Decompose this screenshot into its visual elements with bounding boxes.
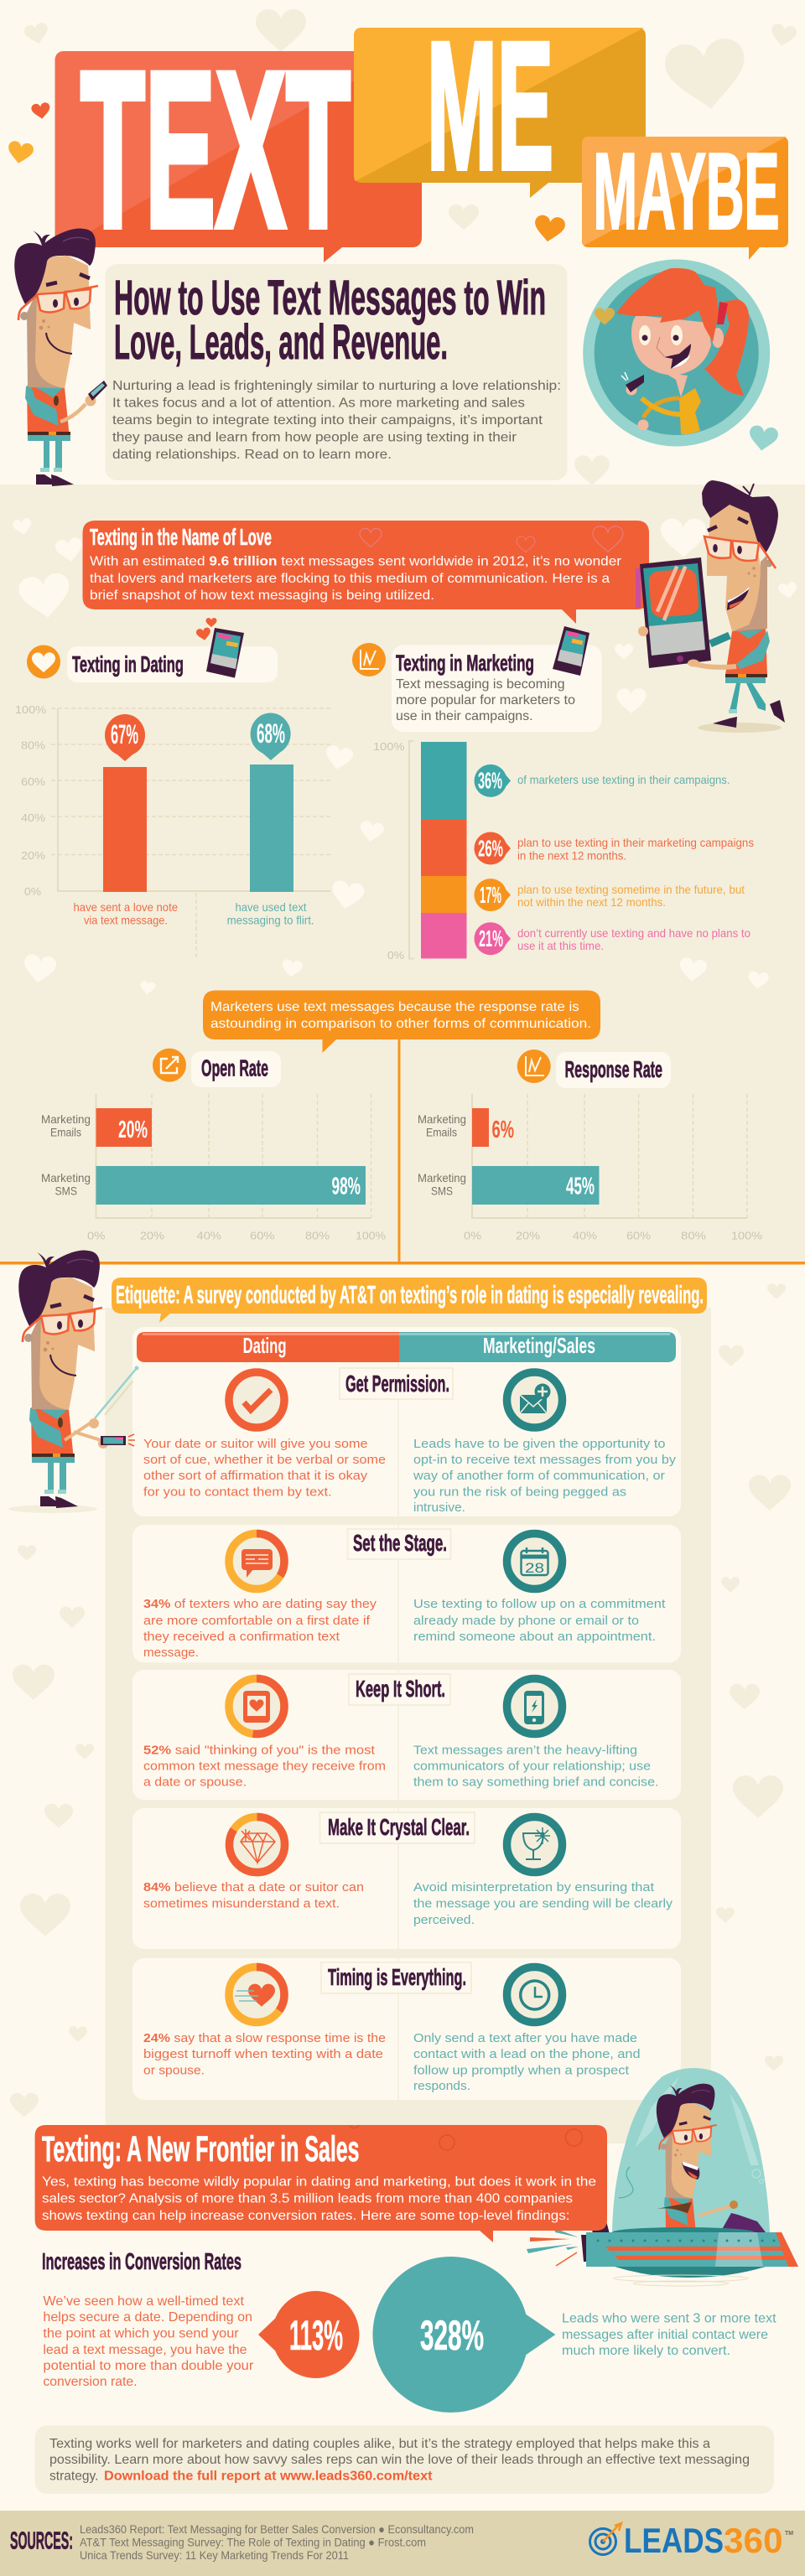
text: dating stage <box>143 1597 377 1660</box>
bar chart: response rate: 60% <box>626 1229 651 1242</box>
card: make it crystal clear <box>132 1808 681 1949</box>
panel: conclusion: Texting works well for marketers and dating couples alike, but it’s the strategy employed that helps make this a <box>49 2437 710 2451</box>
text: marketing permission: way of another form of communication, or <box>413 1469 665 1483</box>
bar: 68%: have used text <box>235 900 307 914</box>
title: speech bubble ME <box>354 4 646 207</box>
heading: set the stage <box>347 1529 451 1559</box>
sources list: Unica Trends Survey: 11 Key Marketing Trends For 2011 <box>80 2548 349 2562</box>
title: speech bubble ME: ME <box>427 4 553 207</box>
text: 113 percent explanation: We’ve seen how a well-timed text <box>43 2294 245 2309</box>
table header: dating: Dating <box>243 1333 287 1358</box>
text: dating stage: are more comfortable on a first date if <box>143 1614 371 1628</box>
segment callout: 21%: don’t currently use texting and have no plans to <box>517 926 750 940</box>
text: 328 percent explanation <box>562 2312 776 2358</box>
orange divider lines <box>0 1039 805 1264</box>
heading: timing is everything <box>321 1962 471 1993</box>
bar: marketing sms 98% <box>41 1166 366 1205</box>
bar: marketing emails 6%: Marketing <box>418 1112 466 1126</box>
stacked bar chart: texting in marketing <box>373 740 754 961</box>
segment callout: 36%: 36% <box>478 768 502 794</box>
text: dating timing <box>143 2031 386 2078</box>
heading: response rate: Response Rate <box>565 1056 662 1082</box>
heading: set the stage: Set the Stage. <box>353 1530 447 1556</box>
text: 328 percent explanation: Leads who were sent 3 or more text <box>562 2312 776 2326</box>
icon: heart in orange circle <box>27 645 60 679</box>
text: dating clear <box>143 1880 364 1911</box>
illustration: girl with phone in circle <box>583 260 770 446</box>
stacked bar chart: texting in marketing: 0% <box>387 949 404 961</box>
icon: phone with hearts <box>195 618 244 678</box>
bar: marketing emails 20%: Marketing <box>41 1112 91 1126</box>
segment callout: 26%: 26% <box>478 835 503 862</box>
segment callout: 26%: in the next 12 months. <box>517 849 626 863</box>
text: marketing clear: Avoid misinterpretation by ensuring that <box>413 1880 655 1894</box>
segment callout: 36%: of marketers use texting in their campaigns. <box>517 773 730 786</box>
text: 113 percent explanation: lead a text message, you have the <box>43 2343 247 2357</box>
bar: 68%: 68% <box>257 718 285 749</box>
icon: clock <box>506 1967 562 2022</box>
title: speech bubble TEXT: TEXT <box>80 26 351 274</box>
stat bubble: 328 percent <box>372 2257 555 2413</box>
text: marketing stage: remind someone about an appointment. <box>413 1630 656 1644</box>
heading: texting in marketing: more popular for marketers to <box>396 693 575 707</box>
title: speech bubble TEXT <box>55 26 422 274</box>
panel: conclusion: strategy. <box>49 2470 99 2483</box>
segment callout: 17% <box>475 879 745 911</box>
bar chart: texting in dating <box>15 703 331 957</box>
callout: a new frontier in sales: sales sector? Analysis of more than 3.5 million leads from more than 400 companies <box>42 2191 573 2205</box>
panel: introduction <box>106 264 567 480</box>
intro paragraph: dating relationships. Read on to learn more. <box>112 448 392 462</box>
callout: texting in the name of love: brief snapshot of how text messaging is being utilized. <box>90 588 434 603</box>
bar: marketing sms 45%: SMS <box>431 1184 453 1198</box>
callout: response rate: astounding in comparison to other forms of communication. <box>210 1017 591 1031</box>
text: marketing clear: perceived. <box>413 1913 475 1927</box>
text: marketing stage: already made by phone or email or to <box>413 1614 639 1628</box>
bar chart: response rate: 80% <box>681 1229 706 1242</box>
icon: phone <box>553 626 589 676</box>
bar chart: texting in dating: 100% <box>15 703 46 716</box>
bar chart: response rate: 100% <box>731 1229 762 1242</box>
intro paragraph: they pause and learn from how people are using texting in their <box>112 431 517 444</box>
heading: get permission: Get Permission. <box>345 1371 449 1397</box>
bar chart: response rate: 20% <box>516 1229 540 1242</box>
bar chart: response rate <box>418 1094 762 1242</box>
text: dating stage: message. <box>143 1646 199 1660</box>
text: dating stage: they received a confirmation text <box>143 1630 340 1644</box>
text: 113 percent explanation <box>43 2294 254 2389</box>
table header: marketing/sales <box>399 1332 676 1362</box>
text: dating timing: or spouse. <box>143 2064 205 2078</box>
callout: texting in the name of love: that lovers and marketers are flocking to this medium of communication. Here is a <box>90 572 610 586</box>
segment callout: 21% <box>475 922 750 955</box>
heading: texting in marketing: Text messaging is becoming <box>396 677 565 692</box>
heading: how to use text messages: Love, Leads, and Revenue. <box>114 315 448 370</box>
text: marketing stage <box>413 1597 666 1644</box>
text: marketing permission: you run the risk of being pegged as <box>413 1485 626 1499</box>
stat bubble: 113 percent: 113% <box>289 2312 343 2359</box>
text: dating permission <box>143 1437 386 1499</box>
heading: open rate <box>153 1049 281 1087</box>
bar: marketing sms 45% <box>418 1166 599 1205</box>
text: dating stage: 34% of texters who are dating say they <box>143 1597 377 1611</box>
bar: marketing sms 45%: 45% <box>566 1174 595 1200</box>
logo: leads360: TM <box>785 2531 793 2537</box>
bar: marketing sms 98%: Marketing <box>41 1171 91 1184</box>
bar: marketing emails 20%: Emails <box>50 1126 81 1139</box>
text: marketing short: Text messages aren’t the heavy-lifting <box>413 1744 637 1757</box>
intro paragraph: Nurturing a lead is frighteningly similar to nurturing a love relationship: <box>112 379 561 393</box>
callout: response rate <box>203 991 600 1053</box>
heading: get permission <box>340 1368 453 1399</box>
text: 113 percent explanation: potential to more than double your <box>43 2359 254 2373</box>
text: dating permission: Your date or suitor will give you some <box>143 1437 367 1451</box>
table header: dating <box>137 1332 399 1362</box>
bar: marketing emails 20%: 20% <box>118 1117 148 1143</box>
text: dating permission: for you to contact them by text. <box>143 1485 332 1499</box>
icon: check mark <box>229 1372 284 1428</box>
footer: sources band <box>0 2511 805 2576</box>
text: 113 percent explanation: the point at which you send your <box>43 2327 239 2341</box>
text: marketing permission: Leads have to be given the opportunity to <box>413 1437 666 1451</box>
character: man holding tablet <box>636 480 785 733</box>
icon: calendar <box>506 1534 562 1589</box>
panel: etiquette backing column <box>106 1308 711 2143</box>
sources list: SOURCES: <box>10 2528 73 2555</box>
bar chart: open rate: 60% <box>250 1229 275 1242</box>
text: dating timing: biggest turnoff when texting with a date <box>143 2047 383 2061</box>
bar chart: open rate: 100% <box>356 1229 386 1242</box>
text: marketing permission <box>413 1437 677 1515</box>
bar: 67% <box>74 714 178 927</box>
bar chart: texting in dating: 80% <box>21 739 45 751</box>
bar: 67%: via text message. <box>84 914 168 927</box>
text: marketing timing <box>413 2031 641 2093</box>
heading: timing is everything: Timing is Everything. <box>328 1964 466 1990</box>
text: dating permission: other sort of affirmation that it is okay <box>143 1469 368 1483</box>
panel: conclusion <box>35 2426 774 2494</box>
card: get permission <box>132 1327 681 1516</box>
text: marketing clear <box>413 1880 673 1927</box>
logo: leads360: LEADS <box>624 2521 724 2560</box>
bar chart: open rate: 40% <box>196 1229 221 1242</box>
heading: make it crystal clear <box>320 1812 475 1843</box>
bar: marketing sms 98%: 98% <box>332 1174 361 1200</box>
bar: marketing emails 6%: Emails <box>426 1126 457 1139</box>
table header: marketing/sales: Marketing/Sales <box>483 1333 595 1358</box>
logo: leads360: 360 <box>724 2521 783 2560</box>
bar chart: open rate <box>41 1094 386 1242</box>
intro paragraph <box>112 379 561 462</box>
callout: texting in the name of love: Texting in the Name of Love <box>90 524 272 550</box>
card: timing is everything <box>132 1958 681 2100</box>
segment callout: 21%: use it at this time. <box>517 939 604 952</box>
bar: marketing emails 6% <box>418 1108 514 1147</box>
heading: response rate <box>517 1050 671 1088</box>
bar chart: texting in dating: 20% <box>21 849 45 862</box>
callout: a new frontier in sales: shows texting can help increase conversion rates. Here are some top-level findings: <box>42 2209 570 2223</box>
heading: keep it short <box>349 1674 450 1705</box>
intro paragraph: It takes focus and a lot of attention. As more marketing and sales <box>112 396 525 411</box>
heading: texting in marketing: Texting in Marketing <box>396 650 534 676</box>
text: marketing timing: follow up promptly when a prospect <box>413 2064 630 2078</box>
bar: 68% <box>227 713 314 927</box>
bar: 67%: 67% <box>111 719 138 749</box>
bar: marketing sms 98%: SMS <box>55 1184 77 1198</box>
text: dating short: common text message they receive from <box>143 1759 386 1774</box>
icon: open arrow <box>153 1049 186 1082</box>
bar: marketing sms 45%: Marketing <box>418 1171 466 1184</box>
callout: a new frontier in sales: Texting: A New Frontier in Sales <box>42 2129 359 2169</box>
stacked bar chart: texting in marketing: 100% <box>373 740 405 753</box>
icon: envelope plus <box>506 1372 562 1428</box>
icon: line chart <box>517 1050 551 1083</box>
icon: calendar: 28 <box>525 1560 544 1576</box>
sources list: AT&T Text Messaging Survey: The Role of Texting in Dating ● Frost.com <box>80 2536 426 2549</box>
text: dating short: 52% said "thinking of you" is the most <box>143 1744 376 1757</box>
heading: texting in marketing <box>352 626 602 732</box>
text: marketing short <box>413 1744 659 1790</box>
heading: open rate: Open Rate <box>201 1055 268 1081</box>
heading: texting in dating: Texting in Dating <box>72 652 184 677</box>
icon: line chart in orange circle <box>352 643 386 676</box>
icon: diamond <box>230 1817 285 1873</box>
text: marketing permission: intrusive. <box>413 1501 465 1515</box>
section background: love statistics <box>0 485 805 1262</box>
text: marketing short: communicators of your relationship; use <box>413 1759 651 1774</box>
heading: texting in dating <box>27 618 278 682</box>
text: dating clear: sometimes misunderstand a text. <box>143 1897 340 1911</box>
segment callout: 21%: 21% <box>479 925 503 951</box>
heading: how to use text messages <box>114 271 546 370</box>
bar chart: texting in dating: 40% <box>21 811 45 824</box>
icon: tablet with heart <box>229 1678 284 1734</box>
character: man pointing with stylus <box>8 1251 139 1513</box>
text: marketing permission: opt-in to receive text messages from you by <box>413 1453 677 1467</box>
bar chart: response rate: 0% <box>464 1229 481 1242</box>
bar chart: open rate: 0% <box>87 1229 106 1242</box>
bar chart: texting in dating: 0% <box>24 885 41 898</box>
icon: glass <box>506 1817 562 1873</box>
bar chart: texting in dating: 60% <box>21 775 45 788</box>
callout: texting in the name of love <box>82 521 649 624</box>
bar: marketing emails 20% <box>41 1108 152 1147</box>
segment callout: 26%: plan to use texting in their marketing campaigns <box>517 836 754 849</box>
panel: conclusion: Download the full report at www.leads360.com/text <box>104 2470 433 2483</box>
stat bubble: 113 percent <box>258 2291 359 2378</box>
icon: fast heart <box>229 1967 284 2022</box>
sources list <box>10 2522 474 2562</box>
callout: a new frontier in sales <box>35 2125 607 2242</box>
text: 113 percent explanation: conversion rate. <box>43 2375 138 2389</box>
text: marketing timing: responds. <box>413 2079 470 2093</box>
segment callout: 36% <box>475 765 730 797</box>
text: marketing stage: Use texting to follow up on a commitment <box>413 1597 666 1611</box>
text: 113 percent explanation: helps secure a date. Depending on <box>43 2310 252 2325</box>
text: dating clear: 84% believe that a date or suitor can <box>143 1880 364 1894</box>
icon: phone with bolt <box>506 1678 562 1734</box>
bar: 68%: messaging to flirt. <box>227 914 314 927</box>
text: dating short <box>143 1744 386 1790</box>
stat bubble: 328 percent: 328% <box>420 2312 484 2359</box>
text: marketing clear: the message you are sending will be clearly <box>413 1897 673 1911</box>
text: dating short: a date or spouse. <box>143 1775 247 1790</box>
callout: texting in the name of love: With an estimated 9.6 trillion text messages sent worldwide in 2012, it’s no wonder <box>90 555 622 568</box>
logo: leads360 <box>590 2521 793 2560</box>
text: marketing timing: Only send a text after you have made <box>413 2031 637 2045</box>
segment callout: 26% <box>475 832 754 865</box>
heading: increases in conversion rates: Increases in Conversion Rates <box>42 2248 242 2274</box>
text: dating permission: sort of cue, whether it be verbal or some <box>143 1453 386 1467</box>
heading: keep it short: Keep It Short. <box>356 1676 445 1702</box>
character: man texting <box>14 229 107 486</box>
callout: response rate: Marketers use text messages because the response rate is <box>210 1000 579 1014</box>
text: marketing short: them to say something brief and concise. <box>413 1775 659 1790</box>
bar: 67%: have sent a love note <box>74 900 178 914</box>
heading: make it crystal clear: Make It Crystal Clear. <box>328 1814 470 1840</box>
text: marketing timing: contact with a lead on the phone, and <box>413 2047 641 2061</box>
bar chart: open rate: 80% <box>305 1229 330 1242</box>
bar chart: response rate: 40% <box>573 1229 597 1242</box>
callout: a new frontier in sales: Yes, texting has become wildly popular in dating and marketing, but does it work in the <box>42 2174 596 2189</box>
segment callout: 17%: plan to use texting sometime in the future, but <box>517 883 745 896</box>
segment callout: 17%: 17% <box>480 882 501 908</box>
bar chart: open rate: 20% <box>140 1229 164 1242</box>
card: keep it short <box>132 1670 681 1800</box>
heading: texting in marketing: use in their campaigns. <box>396 709 533 723</box>
panel: conclusion: possibility. Learn more about how savvy sales reps can win the love of their leads through an effective text messaging <box>49 2453 750 2467</box>
intro paragraph: teams begin to integrate texting into their campaigns, it’s important <box>112 413 543 428</box>
callout: etiquette <box>112 1278 707 1323</box>
bar: marketing emails 6%: 6% <box>491 1117 514 1143</box>
sources list: Leads360 Report: Text Messaging for Better Sales Conversion ● Econsultancy.com <box>80 2522 474 2536</box>
text: 328 percent explanation: messages after initial contact were <box>562 2328 768 2342</box>
character: man in rocket car <box>527 2068 798 2286</box>
segment callout: 17%: not within the next 12 months. <box>517 895 666 909</box>
text: 328 percent explanation: much more likely to convert. <box>562 2344 730 2358</box>
icon: chat bubble <box>229 1534 284 1589</box>
text: dating timing: 24% say that a slow response time is the <box>143 2031 386 2045</box>
card: set the stage <box>132 1525 681 1663</box>
